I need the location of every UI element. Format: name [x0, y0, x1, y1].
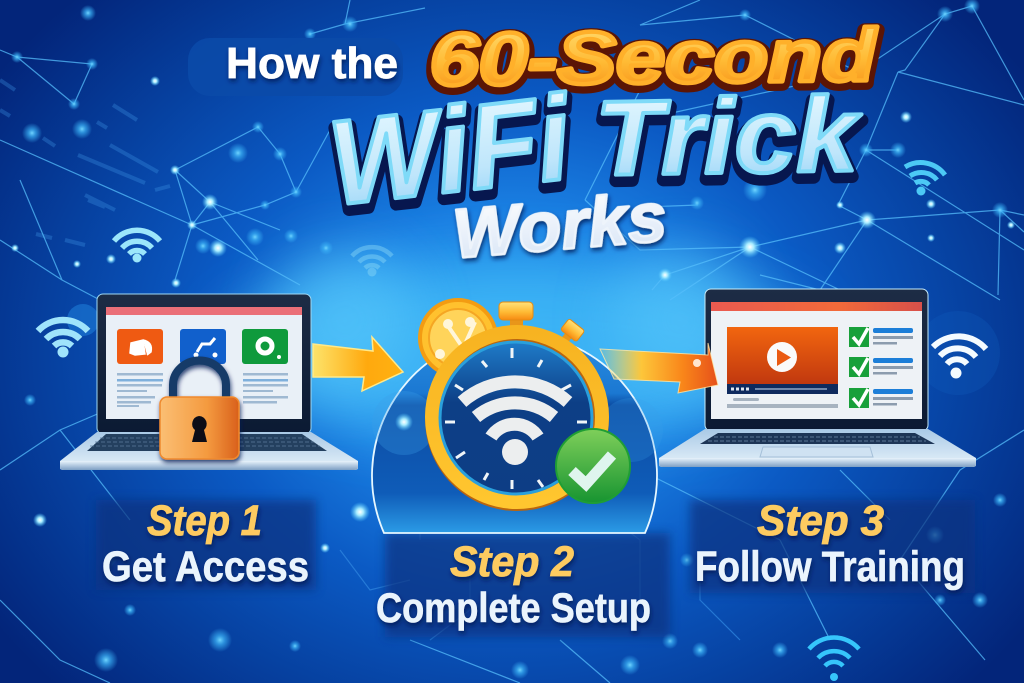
- stopwatch: [420, 300, 630, 511]
- video player: [727, 327, 838, 394]
- laptop lid: [705, 289, 928, 431]
- wifi symbol: [462, 382, 568, 465]
- step 2 name: Complete Setup: [376, 584, 651, 631]
- laptop screen: [711, 302, 922, 419]
- keyboard: [700, 433, 935, 444]
- video meta: [727, 398, 838, 408]
- network nodes: bright: [11, 76, 1015, 553]
- icon: wifi right: [916, 311, 1000, 395]
- step 1 name: Get Access: [102, 543, 309, 591]
- play button: [767, 342, 797, 372]
- laptop base: [659, 429, 976, 467]
- title: Works: Works: [450, 177, 670, 273]
- lock body: [160, 397, 239, 459]
- laptop lid: [97, 294, 311, 434]
- laptop: step 1: [60, 294, 358, 470]
- checklist: [849, 327, 913, 408]
- background streaks: [0, 80, 170, 245]
- crown: [499, 302, 533, 334]
- text lines right: [243, 373, 288, 404]
- title: [188, 13, 878, 273]
- text lines left: [117, 373, 163, 407]
- arrow: step 2 to step 3: [600, 343, 718, 393]
- step label backing panels: [96, 500, 975, 637]
- screen header bar: [106, 307, 302, 315]
- title: Trick: Trick: [594, 75, 864, 198]
- step 3 label: [695, 497, 965, 591]
- side button: [554, 319, 585, 351]
- globe behind stopwatch: [372, 333, 663, 533]
- laptop base: [60, 432, 358, 470]
- step 1 label: [102, 497, 309, 591]
- shackle: [173, 361, 226, 400]
- step 2 label: [376, 538, 651, 631]
- icon: padlock: [160, 361, 239, 459]
- card icon: blue: [180, 329, 226, 364]
- title: Trick: Trick: [594, 81, 864, 204]
- step 2 number: Step 2: [450, 538, 574, 586]
- front edge: [659, 458, 976, 467]
- check badge: [556, 429, 630, 503]
- card icon: orange: [117, 329, 163, 364]
- dial: [440, 342, 592, 494]
- gold coin: [420, 300, 496, 376]
- icon: wifi left: [38, 304, 99, 358]
- title pill: [188, 38, 403, 96]
- card icon: green: [242, 329, 288, 364]
- laptop screen: [106, 307, 302, 419]
- title: 60-Second: 60-Second: [429, 13, 878, 101]
- icon: wifi faint centre left: [352, 247, 392, 276]
- keyboard: [87, 434, 327, 451]
- title: 60-Second: 60-Second: [429, 16, 878, 104]
- step 3 number: Step 3: [757, 497, 884, 545]
- outer ring: [425, 327, 609, 511]
- step 1 number: Step 1: [147, 497, 262, 545]
- icon: wifi bottom: [809, 638, 859, 681]
- step 3 name: Follow Training: [695, 543, 965, 591]
- laptop: step 3: [659, 289, 976, 467]
- title: WiFi: WiFi: [323, 76, 580, 237]
- screen header bar: [711, 302, 922, 311]
- tick marks: [445, 348, 587, 489]
- icon: wifi top left: [114, 230, 160, 262]
- icon: wifi top right: [905, 163, 945, 196]
- title: How the: How the: [226, 39, 398, 88]
- trackpad: [760, 447, 873, 457]
- title: WiFi: WiFi: [323, 70, 579, 231]
- keyhole: [192, 416, 207, 442]
- arrow: step 1 to step 2: [313, 337, 403, 391]
- front edge: [60, 461, 358, 470]
